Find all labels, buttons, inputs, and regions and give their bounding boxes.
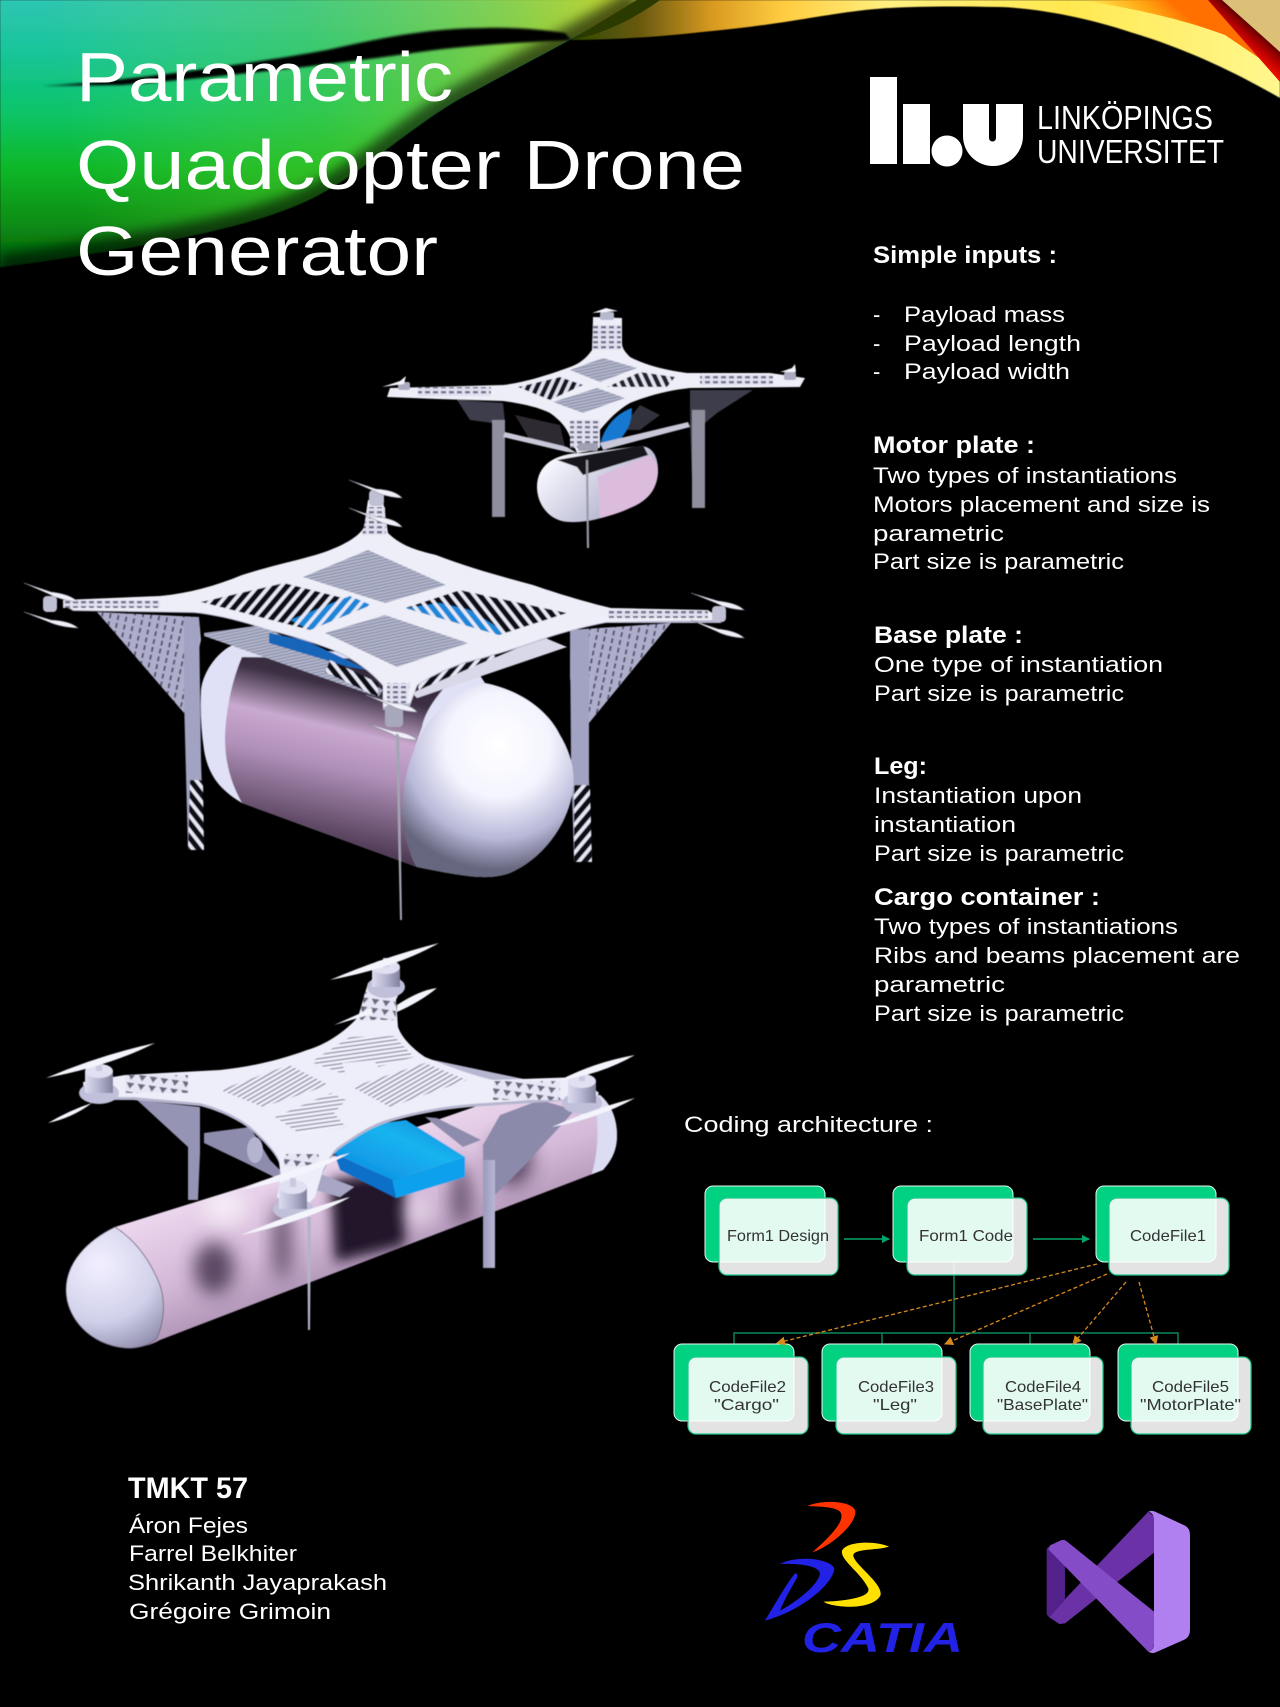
team credits: Grégoire Grimoin [129, 1599, 331, 1624]
title: Generator [76, 212, 438, 290]
blue payload box [334, 1120, 465, 1198]
base plate: Part size is parametric [874, 681, 1124, 706]
plate panels [63, 507, 708, 705]
dashed arrows from CodeFile1 [777, 1264, 1156, 1344]
base plate and blue payload [204, 625, 567, 698]
title: Quadcopter Drone [76, 126, 745, 204]
gold wave [571, 0, 1280, 98]
base plate [874, 622, 1163, 706]
team credits: Shrikanth Jayaprakash [128, 1570, 387, 1595]
logo wordmark [1037, 99, 1224, 170]
header wave swoosh [0, 0, 1280, 267]
left leg and bracket [137, 1100, 300, 1200]
cargo container: Ribs and beams placement are [874, 943, 1240, 968]
top plate [83, 967, 599, 1213]
cargo cylinder [66, 1080, 640, 1348]
node: CodeFile1 [1096, 1186, 1229, 1275]
coding architecture heading: Coding architecture : [684, 1112, 933, 1137]
red and tan corner [1208, 0, 1280, 82]
cylinder end cap [66, 1227, 163, 1348]
logo: CATIA: CATIA [802, 1614, 963, 1661]
motors [79, 958, 602, 1220]
top plate [63, 500, 722, 710]
simple inputs: Simple inputs : [873, 242, 1057, 269]
logo: Linköpings universitet [870, 77, 1224, 170]
connector tree [734, 1262, 1178, 1344]
leg [874, 753, 1124, 866]
node: Form1 Code [893, 1186, 1027, 1275]
logo: CATIA [765, 1502, 963, 1661]
title: Parametric [76, 38, 453, 116]
logo: Visual Studio [1047, 1511, 1190, 1653]
node: CodeFile3 Leg [822, 1344, 956, 1434]
base plate: One type of instantiation [874, 652, 1163, 677]
node: CodeFile5 MotorPlate [1118, 1344, 1251, 1434]
simple inputs: Payload width [904, 359, 1070, 384]
leg: Part size is parametric [874, 841, 1124, 866]
motor plate: Part size is parametric [873, 549, 1124, 574]
simple inputs: Payload length [904, 331, 1081, 356]
node: CodeFile3 Leg: CodeFile3 [858, 1379, 934, 1396]
team credits: Áron Fejes [129, 1513, 248, 1538]
base plate and blue payload [503, 408, 690, 453]
vertical propeller blade [587, 460, 588, 548]
cargo container: parametric [874, 972, 1005, 997]
team credits [128, 1472, 387, 1624]
node: CodeFile5 MotorPlate: "MotorPlate" [1140, 1397, 1241, 1414]
node: CodeFile2 Cargo [674, 1344, 808, 1434]
flowchart: coding architecture [674, 1186, 1251, 1434]
motors [43, 490, 726, 727]
node: CodeFile2 Cargo: "Cargo" [714, 1397, 779, 1414]
legs and brackets [457, 390, 753, 517]
logo wordmark: LINKÖPINGS [1037, 99, 1213, 136]
motor plate: Motors placement and size is [873, 492, 1210, 517]
node: CodeFile3 Leg: "Leg" [873, 1397, 917, 1414]
node: CodeFile4 BasePlate: CodeFile4 [1005, 1379, 1081, 1396]
node: Form1 Design: Form1 Design [727, 1228, 829, 1245]
cargo container [874, 884, 1240, 1026]
cylinder shadows [194, 1080, 640, 1294]
green wave [0, 0, 637, 267]
leg: instantiation [874, 812, 1016, 837]
cargo container: Two types of instantiations [874, 914, 1178, 939]
simple inputs: - [873, 302, 880, 327]
simple inputs [873, 242, 1081, 384]
motor plate: parametric [873, 521, 1004, 546]
title [76, 38, 745, 290]
leg: Leg: [874, 753, 927, 780]
arrow: Form1 Design to Form1 Code [844, 1238, 889, 1240]
vertical propeller blade [396, 733, 402, 920]
simple inputs: - [873, 331, 880, 356]
right leg and bracket [315, 1100, 575, 1268]
motors [382, 308, 796, 451]
motor plate: Motor plate : [873, 432, 1035, 459]
team credits: TMKT 57 [128, 1472, 248, 1505]
node: CodeFile5 MotorPlate: CodeFile5 [1152, 1379, 1229, 1396]
base plate: Base plate : [874, 622, 1023, 649]
node: CodeFile4 BasePlate: "BasePlate" [997, 1397, 1088, 1414]
plate panels [418, 325, 773, 448]
simple inputs: Payload mass [904, 302, 1065, 327]
motor plate [873, 432, 1210, 574]
propellers [24, 480, 744, 740]
plate panels [125, 992, 560, 1167]
arrow: Form1 Code to CodeFile1 [1033, 1238, 1089, 1240]
propellers [46, 943, 635, 1235]
simple inputs: - [873, 359, 880, 384]
logo wordmark: UNIVERSITET [1037, 133, 1224, 170]
drone render: large capsule view [24, 480, 744, 920]
legs and brackets [97, 612, 671, 862]
node: Form1 Code: Form1 Code [919, 1228, 1013, 1245]
text panel: specifications [873, 242, 1240, 1026]
node: CodeFile1: CodeFile1 [1130, 1228, 1206, 1245]
leg: Instantiation upon [874, 783, 1082, 808]
motor plate: Two types of instantiations [873, 463, 1177, 488]
drone render: top view [382, 308, 805, 548]
drone render: side cylinder view [46, 943, 640, 1348]
node: CodeFile2 Cargo: CodeFile2 [709, 1379, 786, 1396]
vertical propeller blade [307, 1217, 311, 1330]
logo mark [870, 77, 1023, 166]
cargo cylinder [201, 645, 574, 877]
node: Form1 Design [705, 1186, 838, 1275]
team credits: Farrel Belkhiter [129, 1541, 297, 1566]
node: CodeFile4 BasePlate [970, 1344, 1103, 1434]
top plate [387, 317, 805, 453]
cargo container: Cargo container : [874, 884, 1100, 911]
cargo container: Part size is parametric [874, 1001, 1124, 1026]
cargo capsule [537, 445, 658, 522]
